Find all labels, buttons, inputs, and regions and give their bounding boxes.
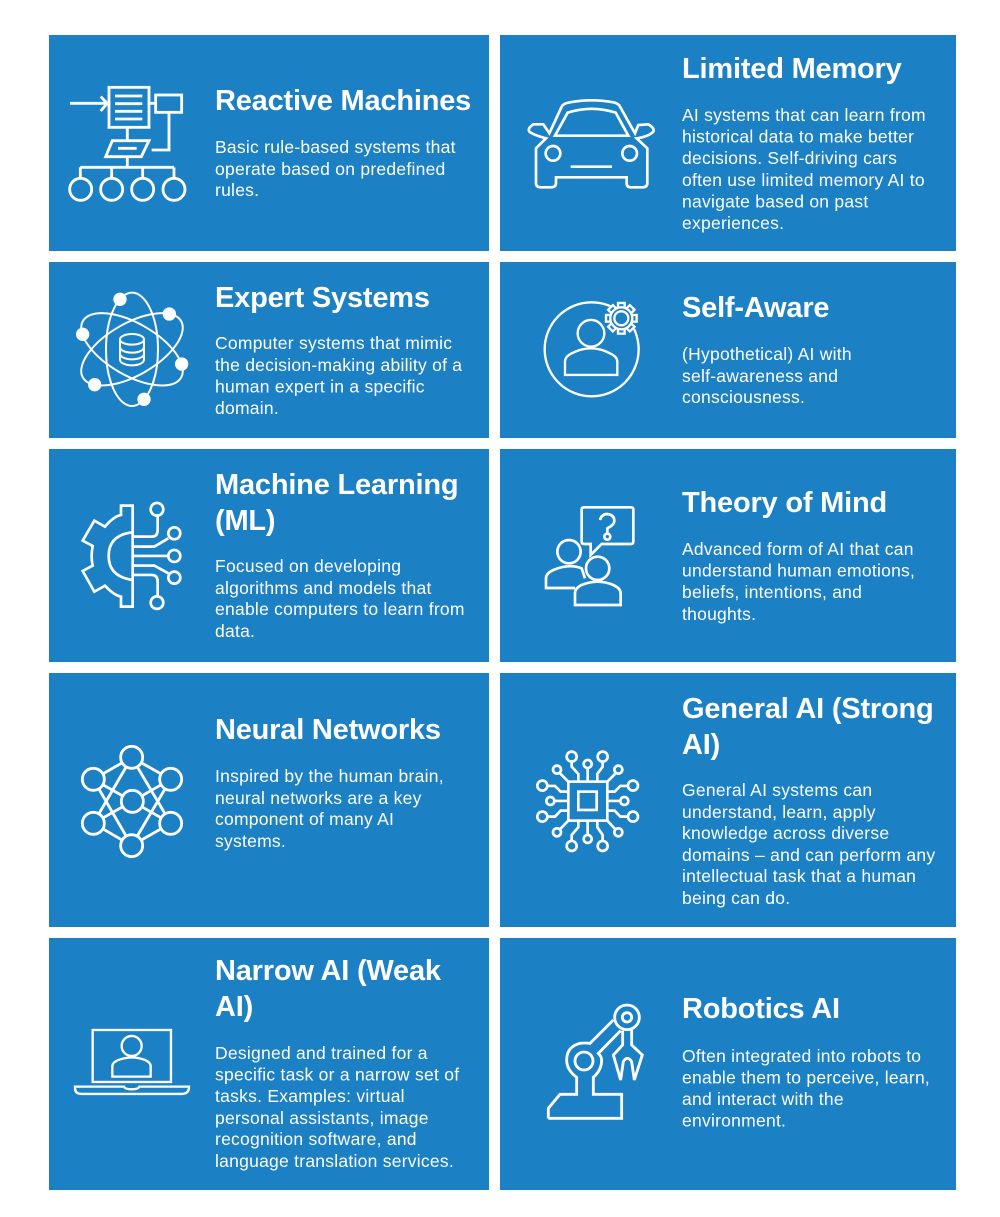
heading: Narrow AI (Weak [215, 955, 442, 987]
panel: machine learning [49, 449, 489, 662]
description: component of many AI [215, 809, 394, 829]
heading: (ML) [215, 505, 275, 537]
description: language translation services. [215, 1151, 454, 1171]
description: experiences. [682, 213, 784, 233]
description: AI systems that can learn from [682, 105, 926, 125]
description: thoughts. [682, 604, 756, 624]
heading: Machine Learning [215, 469, 458, 501]
description: intellectual task that a human [682, 866, 916, 886]
icon: person with gear [545, 302, 639, 396]
description: Inspired by the human brain, [215, 766, 444, 786]
heading: Reactive Machines [215, 85, 471, 117]
icon: circuit chip [537, 752, 638, 851]
description: understand human emotions, [682, 561, 915, 581]
panel: robotics AI [500, 938, 956, 1190]
heading: General AI (Strong [682, 693, 934, 725]
panel: expert systems [49, 262, 489, 438]
panel: neural networks [49, 673, 489, 927]
description: specific task or a narrow set of [215, 1065, 459, 1085]
description: Often integrated into robots to [682, 1046, 921, 1066]
heading: Self-Aware [682, 292, 829, 324]
description: being can do. [682, 888, 790, 908]
heading: Robotics AI [682, 993, 840, 1025]
icon: flowchart [70, 87, 185, 200]
icon: half gear with circuits [83, 503, 180, 609]
description: neural networks are a key [215, 788, 422, 808]
description: navigate based on past [682, 191, 868, 211]
description: and interact with the [682, 1089, 844, 1109]
description: systems. [215, 831, 286, 851]
icon: car [529, 100, 654, 187]
description: enable them to perceive, learn, [682, 1068, 930, 1088]
description: Focused on developing [215, 556, 401, 576]
description: self-awareness and [682, 366, 838, 386]
panel: general AI [500, 673, 956, 927]
panel: limited memory [500, 35, 956, 251]
heading: AI) [682, 729, 720, 761]
panel: reactive machines [49, 35, 489, 251]
panel: theory of mind [500, 449, 956, 662]
description: General AI systems can [682, 780, 872, 800]
description: (Hypothetical) AI with [682, 344, 852, 364]
description: Advanced form of AI that can [682, 539, 914, 559]
icon: two people with question bubble [546, 507, 633, 605]
description: the decision-making ability of a [215, 355, 462, 375]
description: historical data to make better [682, 127, 914, 147]
description: consciousness. [682, 387, 805, 407]
description: human expert in a specific [215, 377, 425, 397]
heading: Theory of Mind [682, 487, 887, 519]
description: Designed and trained for a [215, 1043, 428, 1063]
description: Basic rule-based systems that [215, 137, 456, 157]
description: personal assistants, image [215, 1108, 429, 1128]
description: decisions. Self-driving cars [682, 148, 897, 168]
heading: Expert Systems [215, 282, 430, 314]
description: knowledge across diverse [682, 823, 889, 843]
icon: robot arm [548, 1005, 642, 1118]
description: understand, learn, apply [682, 802, 876, 822]
description: environment. [682, 1111, 786, 1131]
icon: laptop with person [75, 1030, 189, 1094]
description: data. [215, 621, 255, 641]
description: domain. [215, 398, 279, 418]
description: domains – and can perform any [682, 845, 935, 865]
description: Computer systems that mimic [215, 333, 452, 353]
description: algorithms and models that [215, 578, 432, 598]
heading: Neural Networks [215, 714, 441, 746]
description: operate based on predefined [215, 159, 446, 179]
panel: narrow AI [49, 938, 489, 1190]
icon: atom with database [70, 293, 194, 406]
panel: self-aware [500, 262, 956, 438]
description: beliefs, intentions, and [682, 582, 862, 602]
description: rules. [215, 180, 259, 200]
heading: Limited Memory [682, 53, 902, 85]
description: often use limited memory AI to [682, 170, 925, 190]
icon: neural network [82, 746, 182, 857]
description: tasks. Examples: virtual [215, 1086, 405, 1106]
description: enable computers to learn from [215, 599, 465, 619]
description: recognition software, and [215, 1129, 417, 1149]
heading: AI) [215, 991, 253, 1023]
